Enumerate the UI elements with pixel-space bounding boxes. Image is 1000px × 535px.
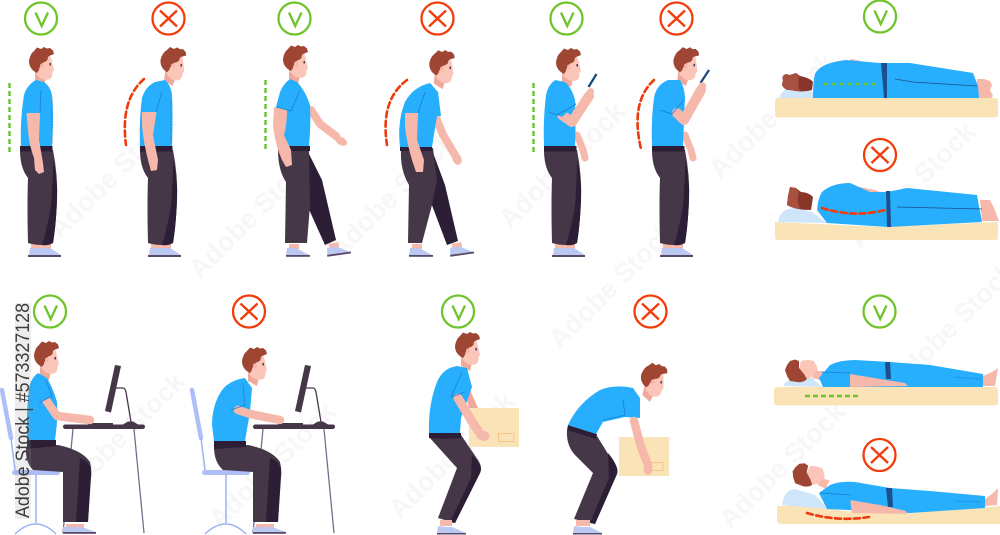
icon: phone: [700, 70, 709, 83]
figure: incorrect lifting: [567, 296, 669, 534]
watermark pattern: Adobe Stock: [713, 396, 852, 534]
figure: incorrect lying on back: [777, 439, 1000, 524]
watermark pattern: Adobe Stock: [493, 96, 632, 234]
watermark pattern: Adobe Stock: [543, 216, 682, 354]
figure: correct sitting at desk: [2, 296, 145, 534]
watermark pattern: Adobe Stock: [203, 396, 342, 534]
figure: correct lying on back: [774, 296, 998, 406]
figure: incorrect slouched standing: [125, 2, 187, 257]
watermark pattern: Adobe Stock: [843, 116, 982, 254]
stock id label: Adobe Stock | #573327128: [12, 303, 34, 518]
figure: incorrect walking: [386, 2, 474, 257]
watermark pattern: Adobe Stock: [323, 126, 462, 264]
icon: phone: [588, 74, 596, 87]
watermark pattern: Adobe Stock: [53, 366, 192, 504]
figure: incorrect lying on stomach: [775, 139, 999, 240]
figure: incorrect phone use: [638, 2, 709, 257]
figure: correct phone use: [534, 2, 596, 257]
figure: correct walking: [266, 2, 351, 257]
watermark pattern: Adobe Stock: [703, 46, 842, 184]
watermark pattern: Adobe Stock: [43, 106, 182, 244]
watermark pattern: Adobe Stock: [383, 386, 522, 524]
watermark pattern: Adobe Stock: [183, 146, 322, 284]
figure: correct lifting: [429, 296, 519, 534]
figure: correct standing posture: [10, 2, 61, 257]
figure: correct lying on stomach: [775, 0, 998, 118]
figure: incorrect sitting at desk: [192, 296, 335, 534]
